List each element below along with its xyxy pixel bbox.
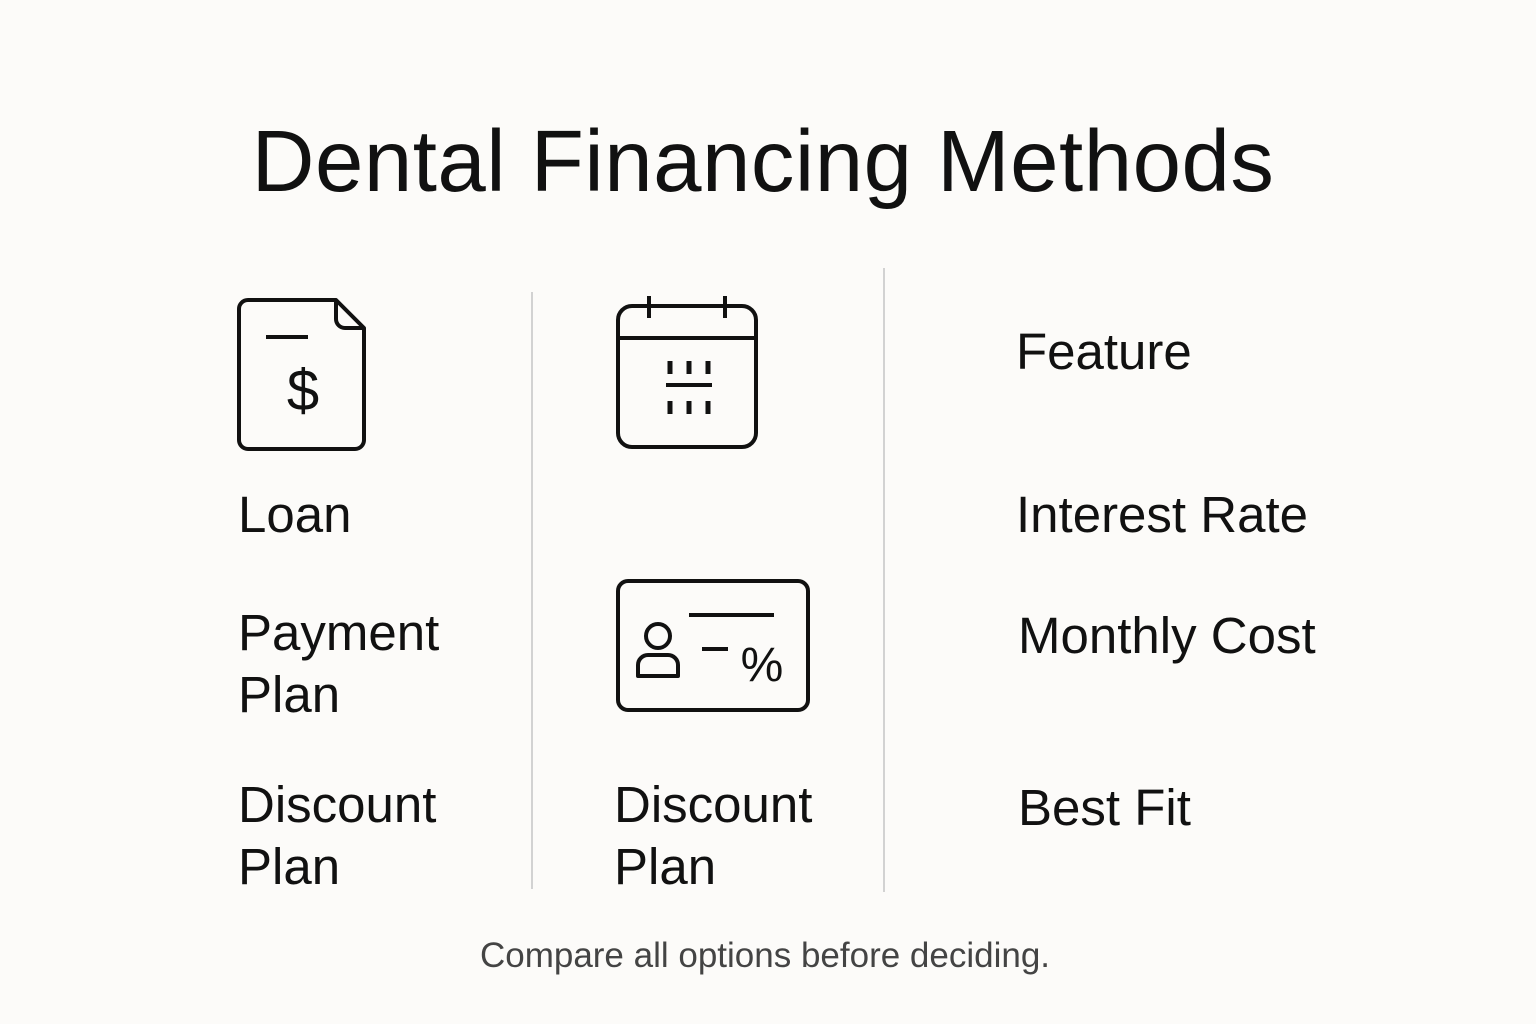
label: Payment Plan: Payment — [238, 604, 439, 661]
label: Best Fit: Best Fit — [1018, 779, 1191, 836]
label: Discount Plan middle: Plan — [614, 838, 716, 895]
icon: discount card: % — [741, 639, 783, 692]
label: Payment Plan: Plan — [238, 666, 340, 723]
icon: dollar document: $ — [287, 358, 319, 423]
label: Discount Plan left — [238, 776, 436, 895]
label: Discount Plan left: Plan — [238, 838, 340, 895]
title: Dental Financing Methods — [252, 113, 1274, 210]
label: Discount Plan left: Discount — [238, 776, 436, 833]
label: Feature: Feature — [1016, 323, 1192, 380]
label: Discount Plan middle: Discount — [614, 776, 812, 833]
label: Loan: Loan — [238, 486, 351, 543]
label: Interest Rate: Interest Rate — [1016, 486, 1308, 543]
icon: discount card — [616, 579, 810, 712]
footer note: Compare all options before deciding. — [480, 936, 1050, 975]
icon: dollar document — [237, 298, 366, 451]
icon: calendar — [616, 296, 758, 449]
label: Discount Plan middle — [614, 776, 812, 895]
label: Payment Plan — [238, 604, 439, 723]
label: Monthly Cost: Monthly Cost — [1018, 607, 1316, 664]
